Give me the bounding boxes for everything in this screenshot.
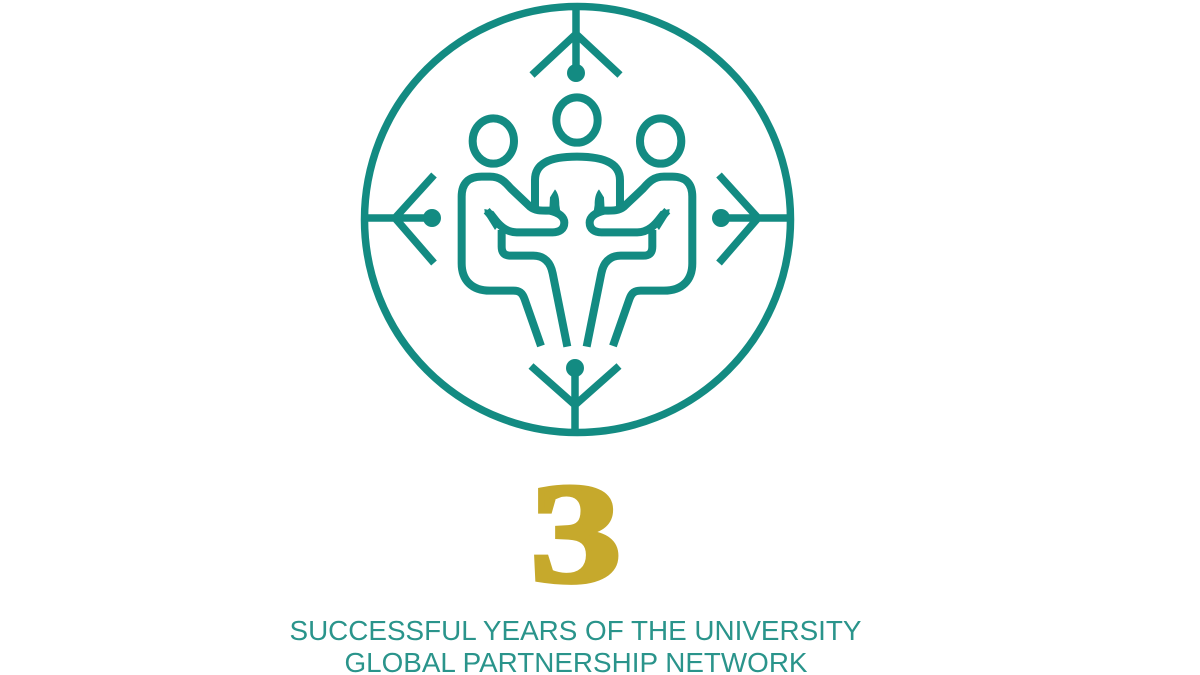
left cuff — [484, 209, 502, 230]
arrow: top — [532, 6, 620, 82]
caption — [290, 615, 862, 675]
emblem: circle with people and arrows — [364, 6, 790, 433]
person: left — [462, 118, 567, 347]
arrow: bottom — [531, 359, 619, 433]
person: centre — [535, 97, 620, 207]
icon: three seated people — [462, 97, 692, 347]
left thumb — [549, 189, 561, 214]
right thumb — [593, 189, 605, 214]
big number 3: 3 — [531, 456, 621, 612]
arrow: left — [366, 175, 441, 263]
arrow: right — [712, 175, 789, 263]
right cuff — [652, 209, 670, 230]
caption line 1: SUCCESSFUL YEARS OF THE UNIVERSITY — [290, 615, 862, 646]
person: right — [587, 118, 692, 347]
outer ring — [364, 6, 790, 432]
